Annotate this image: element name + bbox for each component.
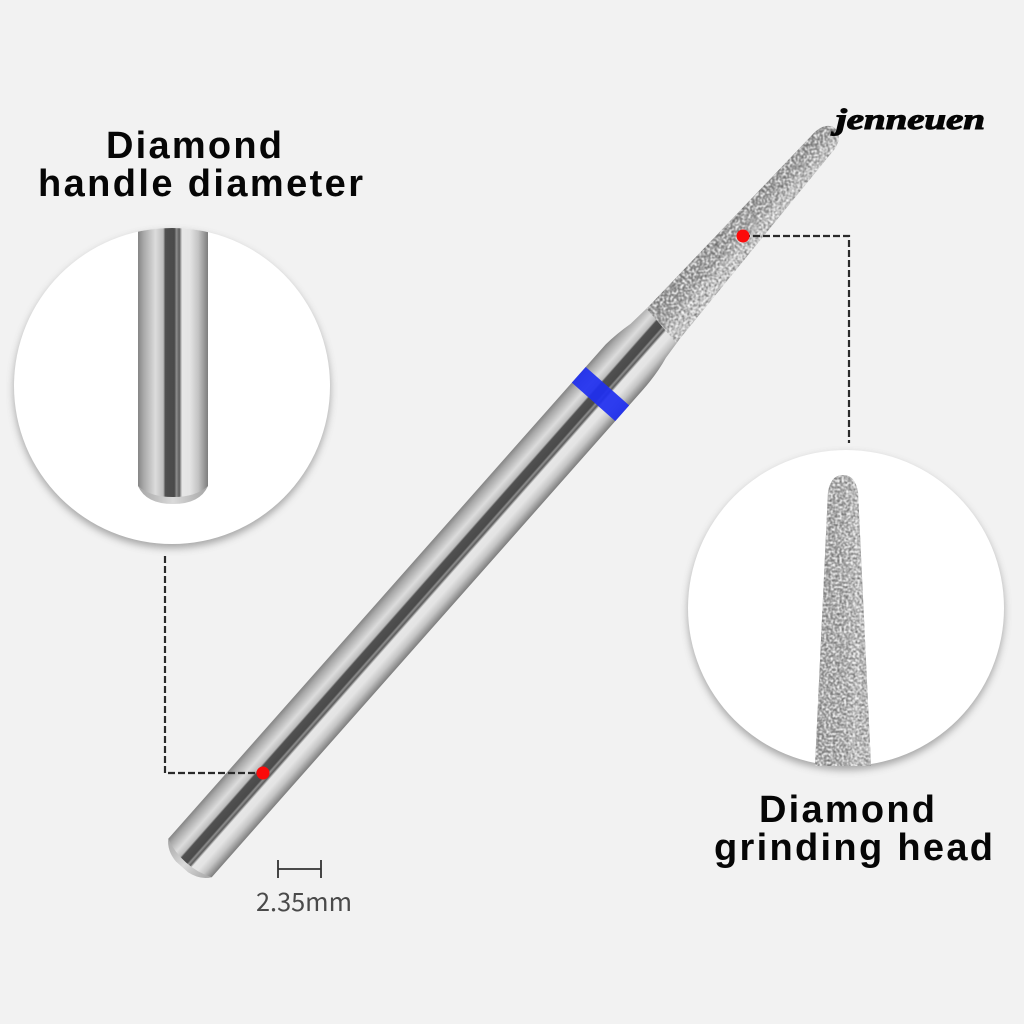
handle close-up bbox=[138, 228, 208, 504]
leader line: head bbox=[743, 236, 849, 443]
red dot: handle bbox=[256, 766, 270, 780]
blue ring bbox=[572, 367, 629, 421]
heading: handle diameter: handle diameter bbox=[38, 163, 363, 205]
heading: handle diameter: Diamond bbox=[106, 125, 282, 167]
heading: grinding head bbox=[714, 789, 993, 869]
grinding head close-up bbox=[815, 475, 871, 766]
heading: grinding head: grinding head bbox=[714, 827, 993, 869]
leader line: handle bbox=[165, 556, 263, 773]
panel: handle detail circle bbox=[14, 228, 330, 548]
brand watermark: jenneuen bbox=[831, 103, 985, 136]
drill bit bbox=[160, 108, 858, 886]
shank and neck bbox=[164, 303, 686, 882]
red dot: head bbox=[736, 230, 750, 242]
panel: grinding head detail circle bbox=[688, 450, 1004, 770]
shank end cap bbox=[160, 839, 212, 886]
dimension marker bbox=[256, 860, 352, 919]
dimension label: 2.35mm bbox=[256, 883, 352, 919]
heading: grinding head: Diamond bbox=[759, 789, 935, 831]
heading: handle diameter bbox=[38, 125, 363, 205]
diamond head bbox=[647, 126, 839, 343]
